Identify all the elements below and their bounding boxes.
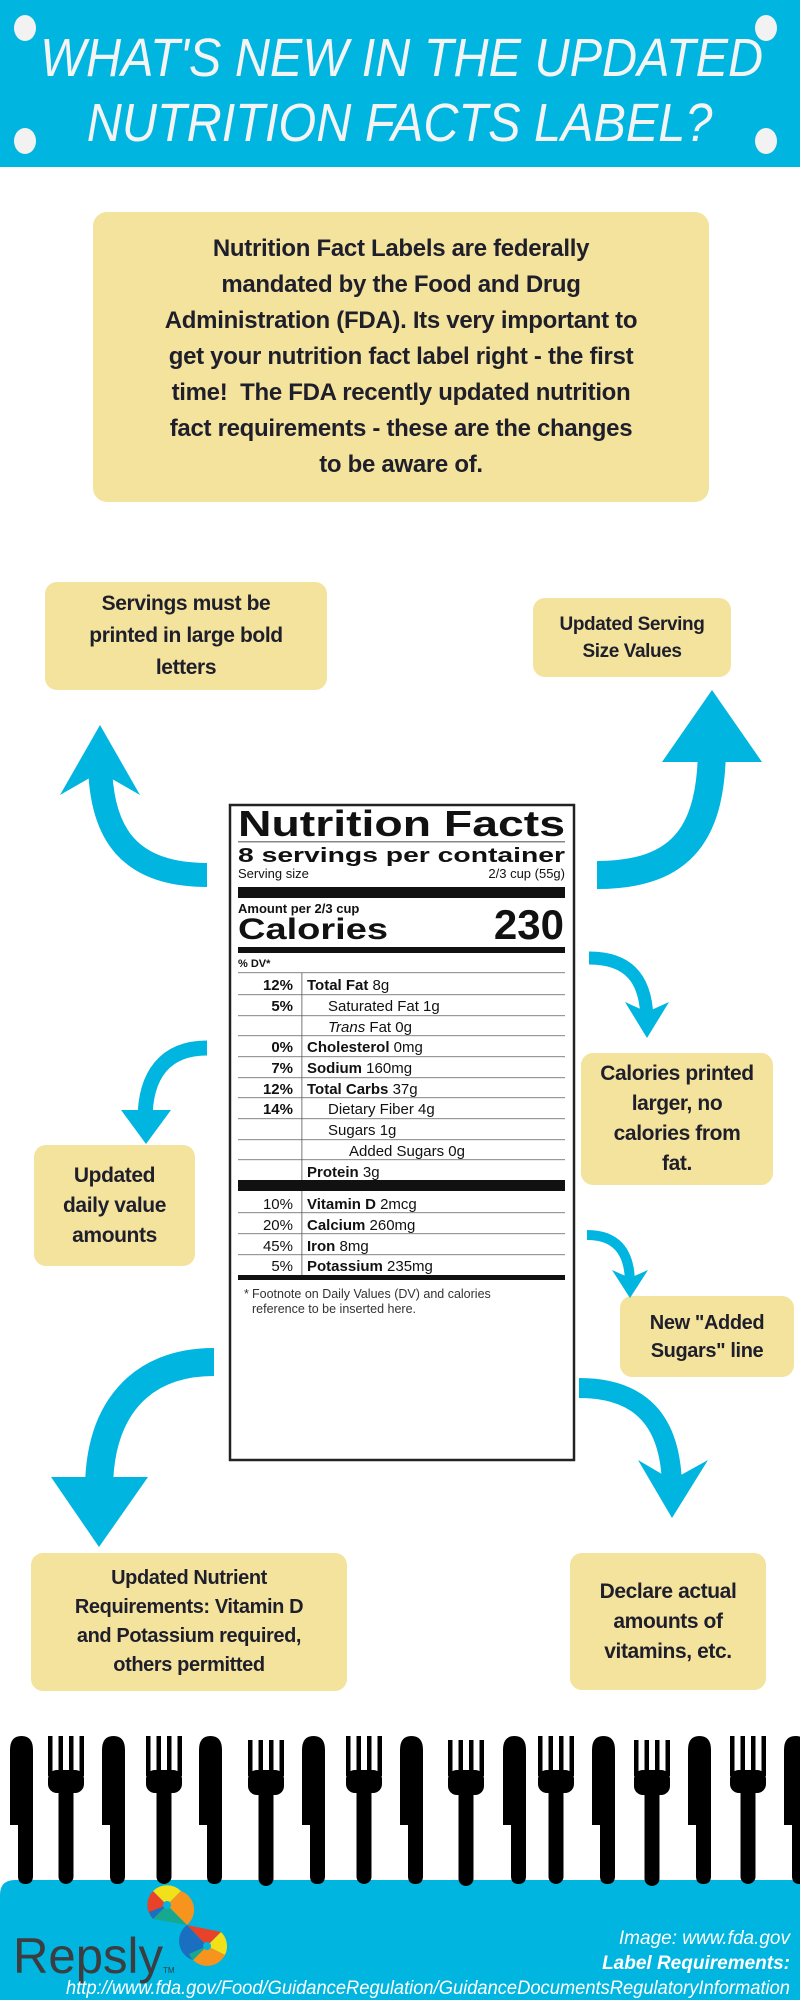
arrow: to servings box <box>60 725 207 875</box>
nutrition facts label: Trans Fat 0g <box>328 1019 412 1036</box>
nutrition facts label: Sodium 160mg <box>307 1060 412 1077</box>
callout: servings bold: printed in large bold <box>89 624 283 647</box>
intro text box: to be aware of. <box>319 451 483 478</box>
arrow: to serving size box <box>597 690 762 875</box>
intro text box: mandated by the Food and Drug <box>221 271 581 298</box>
credits text <box>66 1928 791 1999</box>
nutrition facts label: Total Carbs 37g <box>307 1081 418 1098</box>
nutrition facts label: Total Fat 8g <box>307 977 389 994</box>
intro text box: Administration (FDA). Its very important to <box>165 307 637 334</box>
nutrition facts label: Amount per 2/3 cup <box>238 901 359 916</box>
callout: nutrient requirements: Requirements: Vitamin D <box>75 1596 303 1618</box>
credits text: Image: www.fda.gov <box>619 1928 791 1949</box>
dot <box>14 128 36 154</box>
logo: Repsly wordmark: Repsly <box>13 1928 163 1984</box>
arrow: to nutrient requirements box <box>51 1362 214 1547</box>
callout: daily values: amounts <box>72 1224 157 1246</box>
dot <box>14 15 36 41</box>
callout: calories larger: calories from <box>614 1122 740 1145</box>
nutrition facts label: Calories <box>238 913 388 946</box>
nutrition facts label: 0% <box>271 1039 293 1056</box>
nutrition facts label: 8 servings per container <box>238 845 565 867</box>
footer band <box>0 1880 800 2000</box>
logo: Repsly mark <box>147 1885 227 1966</box>
callout: daily values: Updated <box>74 1164 155 1186</box>
nutrition facts label: Vitamin D 2mcg <box>307 1196 417 1213</box>
callout: servings bold: letters <box>156 656 216 679</box>
nutrition facts label: Iron 8mg <box>307 1238 369 1255</box>
callout: daily values <box>34 1145 195 1266</box>
nutrition facts label: Potassium 235mg <box>307 1258 433 1275</box>
nutrition facts label: Dietary Fiber 4g <box>328 1101 435 1118</box>
nutrition facts label: 7% <box>271 1060 293 1077</box>
callout: calories larger: larger, no <box>632 1092 722 1115</box>
title line 2: NUTRITION FACTS LABEL? <box>87 93 713 153</box>
callout: daily values: daily value <box>63 1194 166 1216</box>
nutrition facts label: Nutrition Facts <box>238 803 565 844</box>
callout: servings bold <box>45 582 327 690</box>
nutrition facts label: 12% <box>263 977 293 994</box>
arrow: to calories box <box>589 958 669 1038</box>
arrow: to declare amounts box <box>579 1388 708 1518</box>
callout: serving size values: Updated Serving <box>560 614 704 634</box>
credits text: http://www.fda.gov/Food/GuidanceRegulation/GuidanceDocumentsRegulatoryInformation <box>66 1978 790 1999</box>
nutrition facts label: 14% <box>263 1101 293 1118</box>
nutrition facts label: 5% <box>271 1258 293 1275</box>
nutrition facts label: % DV* <box>238 958 271 970</box>
nutrition facts label: Serving size <box>238 866 309 881</box>
callout: serving size values <box>533 598 731 677</box>
arrow: to added sugars box <box>587 1235 648 1298</box>
nutrition facts label: Footnote on Daily Values (DV) and calories <box>252 1287 491 1301</box>
cutlery row <box>10 1736 800 1886</box>
callout: declare amounts: amounts of <box>613 1610 723 1632</box>
arrow: to daily value box <box>121 1048 207 1144</box>
intro text box: Nutrition Fact Labels are federally <box>213 235 589 262</box>
dot <box>755 128 777 154</box>
callout: nutrient requirements <box>31 1553 347 1691</box>
callout: calories larger: Calories printed <box>600 1062 754 1085</box>
callout: added sugars: Sugars" line <box>651 1340 763 1362</box>
callout: nutrient requirements: Updated Nutrient <box>111 1567 267 1589</box>
callout: calories larger <box>581 1053 773 1185</box>
nutrition facts label: Added Sugars 0g <box>349 1143 465 1160</box>
callout: calories larger: fat. <box>662 1152 692 1175</box>
intro text box: get your nutrition fact label right - the first <box>169 343 633 370</box>
title line 1: WHAT'S NEW IN THE UPDATED <box>40 28 763 88</box>
nutrition facts label: Sugars 1g <box>328 1122 396 1139</box>
nutrition facts label: reference to be inserted here. <box>252 1302 416 1316</box>
callout: nutrient requirements: and Potassium required, <box>77 1625 301 1647</box>
callout: servings bold: Servings must be <box>102 592 270 615</box>
intro text box <box>93 212 709 502</box>
intro text box: time! The FDA recently updated nutrition <box>172 379 630 406</box>
callout: added sugars: New "Added <box>650 1312 764 1334</box>
nutrition facts label: Calcium 260mg <box>307 1217 415 1234</box>
callout: added sugars <box>620 1296 794 1377</box>
nutrition facts label: 230 <box>494 901 564 948</box>
nutrition facts label: * <box>244 1287 249 1301</box>
nutrition facts label <box>230 803 574 1460</box>
nutrition facts label: 12% <box>263 1081 293 1098</box>
intro text box: fact requirements - these are the changes <box>170 415 632 442</box>
nutrition facts label: Protein 3g <box>307 1164 380 1181</box>
header band <box>0 0 800 167</box>
nutrition facts label: 5% <box>271 998 293 1015</box>
graphics layer: TM <box>163 1966 175 1975</box>
nutrition facts label: Saturated Fat 1g <box>328 998 440 1015</box>
callout: nutrient requirements: others permitted <box>113 1654 265 1676</box>
callout: declare amounts: Declare actual <box>600 1580 736 1602</box>
nutrition facts label: 20% <box>263 1217 293 1234</box>
callout: declare amounts <box>570 1553 766 1690</box>
nutrition facts label: 2/3 cup (55g) <box>488 866 565 881</box>
callout: serving size values: Size Values <box>582 640 682 662</box>
credits text: Label Requirements: <box>602 1953 790 1974</box>
nutrition facts label: Cholesterol 0mg <box>307 1039 423 1056</box>
dot <box>755 15 777 41</box>
nutrition facts label: 10% <box>263 1196 293 1213</box>
nutrition facts label: 45% <box>263 1238 293 1255</box>
callout: declare amounts: vitamins, etc. <box>604 1640 732 1662</box>
